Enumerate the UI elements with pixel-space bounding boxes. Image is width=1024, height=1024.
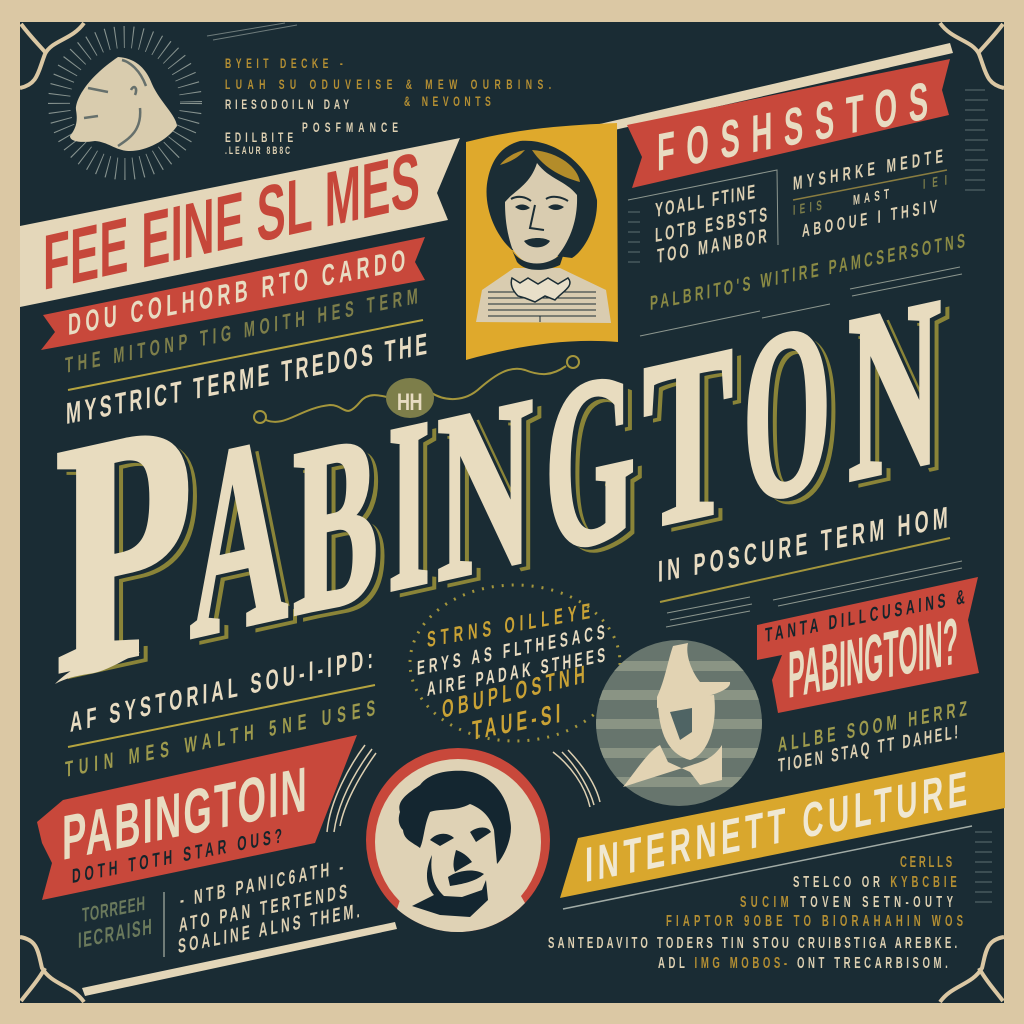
text: allbe soom: ALLBE SOOM HERRZ	[778, 696, 967, 757]
title letters: A	[190, 376, 288, 695]
text block: top-right left column	[655, 180, 767, 268]
text block: bottom right: FIAPTOR 9OBE TO BIORAHAHIN WOS	[666, 911, 963, 930]
hatch details	[628, 90, 988, 262]
title outer shadow: A	[199, 382, 297, 701]
title inner gap: B	[298, 385, 383, 669]
title letters: N	[437, 345, 533, 632]
banner: red right: TANTA DILLCUSAINS &	[765, 585, 965, 647]
title outer shadow: O	[752, 276, 840, 561]
text block: bottom right: SUCIM TOVEN SETN-OUTY	[740, 892, 953, 911]
text: in poscure term: IN POSCURE TERM HOM	[658, 502, 948, 589]
text block: bottom right: CERLLS	[900, 852, 952, 871]
text block: top-right left column: YOALL FTINE	[655, 180, 755, 222]
title letters: P	[55, 348, 193, 744]
title letters: B	[293, 382, 378, 666]
title letters: G	[545, 319, 635, 604]
text block: bottom left cream: ATO PAN TERTENDS	[179, 880, 347, 937]
text block: top-right right column	[793, 147, 947, 242]
divider	[628, 170, 778, 245]
top-left fine lines	[207, 23, 297, 40]
ornament: flourish with badge	[254, 356, 579, 423]
text block: bottom left cream: SOALINE ALNS THEM.	[178, 899, 360, 958]
text block: top-left notes: BYEIT DECKE -	[225, 56, 343, 72]
banner: red right	[757, 577, 979, 713]
text block: bottom left cream: - NTB PANIC6ATH -	[180, 855, 343, 912]
portrait: shoulders and collar	[476, 268, 611, 323]
title outer shadow: N	[446, 351, 542, 638]
title outer shadow: B	[302, 388, 387, 672]
text block: top-left notes: .LEAUR 8B8C	[225, 144, 290, 156]
title: PABINGTON	[55, 246, 950, 750]
text block: bottom left dim: TORREEH	[82, 892, 145, 927]
title outer shadow	[64, 252, 950, 750]
text block: top-left notes: & NEVONTS	[404, 94, 491, 110]
text block: top-right right column: MYSHRKE MEDTE	[793, 147, 943, 195]
title outer shadow: I	[397, 373, 439, 648]
banner: red lower left	[37, 735, 357, 900]
title letters: O	[743, 270, 831, 555]
title inner gap: O	[748, 273, 836, 558]
divider	[163, 892, 165, 957]
title letters: N	[848, 246, 941, 532]
decorative arcs	[327, 745, 600, 832]
icon: P swash	[55, 650, 140, 684]
text block: bottom left cream	[178, 855, 360, 958]
text block: bottom right: SANTEDAVITO TODERS TIN STOU CRUIBSTIGA AREBKE.	[548, 933, 957, 952]
title inner gap: A	[195, 379, 293, 698]
caption rules	[640, 267, 962, 336]
text block: top-left notes: POSFMANCE	[302, 120, 398, 136]
title inner gap: P	[60, 351, 198, 747]
text block: top-left notes: RIESODOILN DAY	[225, 97, 349, 113]
callout: dotted circle text: TAUE-SI	[472, 698, 560, 746]
portrait: red ring man	[366, 748, 550, 932]
title inner gap: G	[550, 322, 640, 607]
triple rules	[666, 561, 962, 627]
text block: top-right right column: MAST	[853, 187, 889, 209]
ornament: flourish with badge: HH	[397, 390, 422, 416]
banner: cream headline: FEE EINE SL MES	[43, 136, 420, 307]
title outer shadow: G	[554, 325, 644, 610]
portrait: face	[505, 163, 577, 266]
banner: red lower left: DOTH TOTH STAR OUS?	[72, 824, 282, 888]
portrait: yellow panel with woman	[466, 123, 618, 360]
text block: top-right right column: IEI	[923, 174, 947, 193]
text block: bottom right: ADL IMG MOBOS- ONT TRECARBISOM.	[658, 953, 948, 972]
text block: bottom left dim: IECRAISH	[78, 913, 152, 953]
title inner gap: I	[393, 370, 435, 645]
title outer shadow: P	[64, 354, 202, 750]
text block: top-left notes: EDILBITE	[225, 130, 293, 146]
text block: bottom right: STELCO OR KYBCBIE	[793, 872, 957, 891]
text block: bottom left dim	[78, 892, 152, 953]
text block: bottom right	[548, 852, 963, 972]
text: allbe soom: TIOEN STAQ TT DAHEL!	[778, 722, 958, 777]
callout: dotted circle text: AIRE PADAK STHEES	[427, 643, 605, 701]
title letters	[55, 246, 941, 744]
text: olive caption top right: PALBRITO'S WITIRE PAMCSERSOTNS	[650, 229, 965, 315]
text: systorial: AF SYSTORIAL SOU-I-IPD:	[70, 642, 373, 738]
callout: dotted circle text: ERYS AS FLTHESACS	[417, 620, 605, 680]
portrait: grey circle with hat	[595, 640, 765, 806]
callout: dotted circle text	[410, 585, 620, 746]
icon: sunburst head	[59, 37, 191, 169]
banner: red lower left: PABINGTOIN	[62, 753, 307, 873]
text: olive tagline: THE MITONP TIG MOITH HES TERM	[65, 283, 418, 378]
callout: dotted circle text: OBUPLOSTNH	[442, 661, 585, 724]
text: tuin mes: TUIN MES WALTH 5NE USES	[65, 695, 375, 782]
title inner gap: N	[853, 249, 946, 535]
text block: top-right left column: TOO MANBOR	[657, 224, 767, 268]
portrait: hair	[487, 141, 597, 258]
title letters: I	[388, 367, 430, 642]
banner: red subhead: DOU COLHORB RTO CARDO	[68, 245, 405, 342]
banner: yellow internet culture: INTERNETT CULTURE	[585, 760, 967, 893]
text block: top-right right column: IEIS	[793, 199, 822, 219]
hatch details	[975, 832, 992, 902]
title letters: T	[643, 295, 733, 580]
text: cream tagline: MYSTRICT TERME TREDOS THE	[66, 327, 427, 431]
title inner gap: N	[442, 348, 538, 635]
banner: red top right: FOSHSSTOS	[657, 71, 928, 183]
title inner gap	[60, 249, 946, 747]
callout: dotted circle text: STRNS OILLEYE	[427, 599, 590, 652]
bottom cream rule	[82, 922, 397, 996]
text block: top-left notes	[225, 56, 551, 156]
text block: top-right left column: LOTB ESBSTS	[655, 203, 767, 247]
text block: top-right right column: ABOOUE I THSIV	[802, 197, 937, 242]
text block: top-left notes: LUAH SU ODUVEISE & MEW OURBINS.	[225, 77, 551, 93]
title outer shadow: T	[652, 301, 742, 586]
top decorative rule	[500, 43, 953, 156]
title inner gap: T	[648, 298, 738, 583]
